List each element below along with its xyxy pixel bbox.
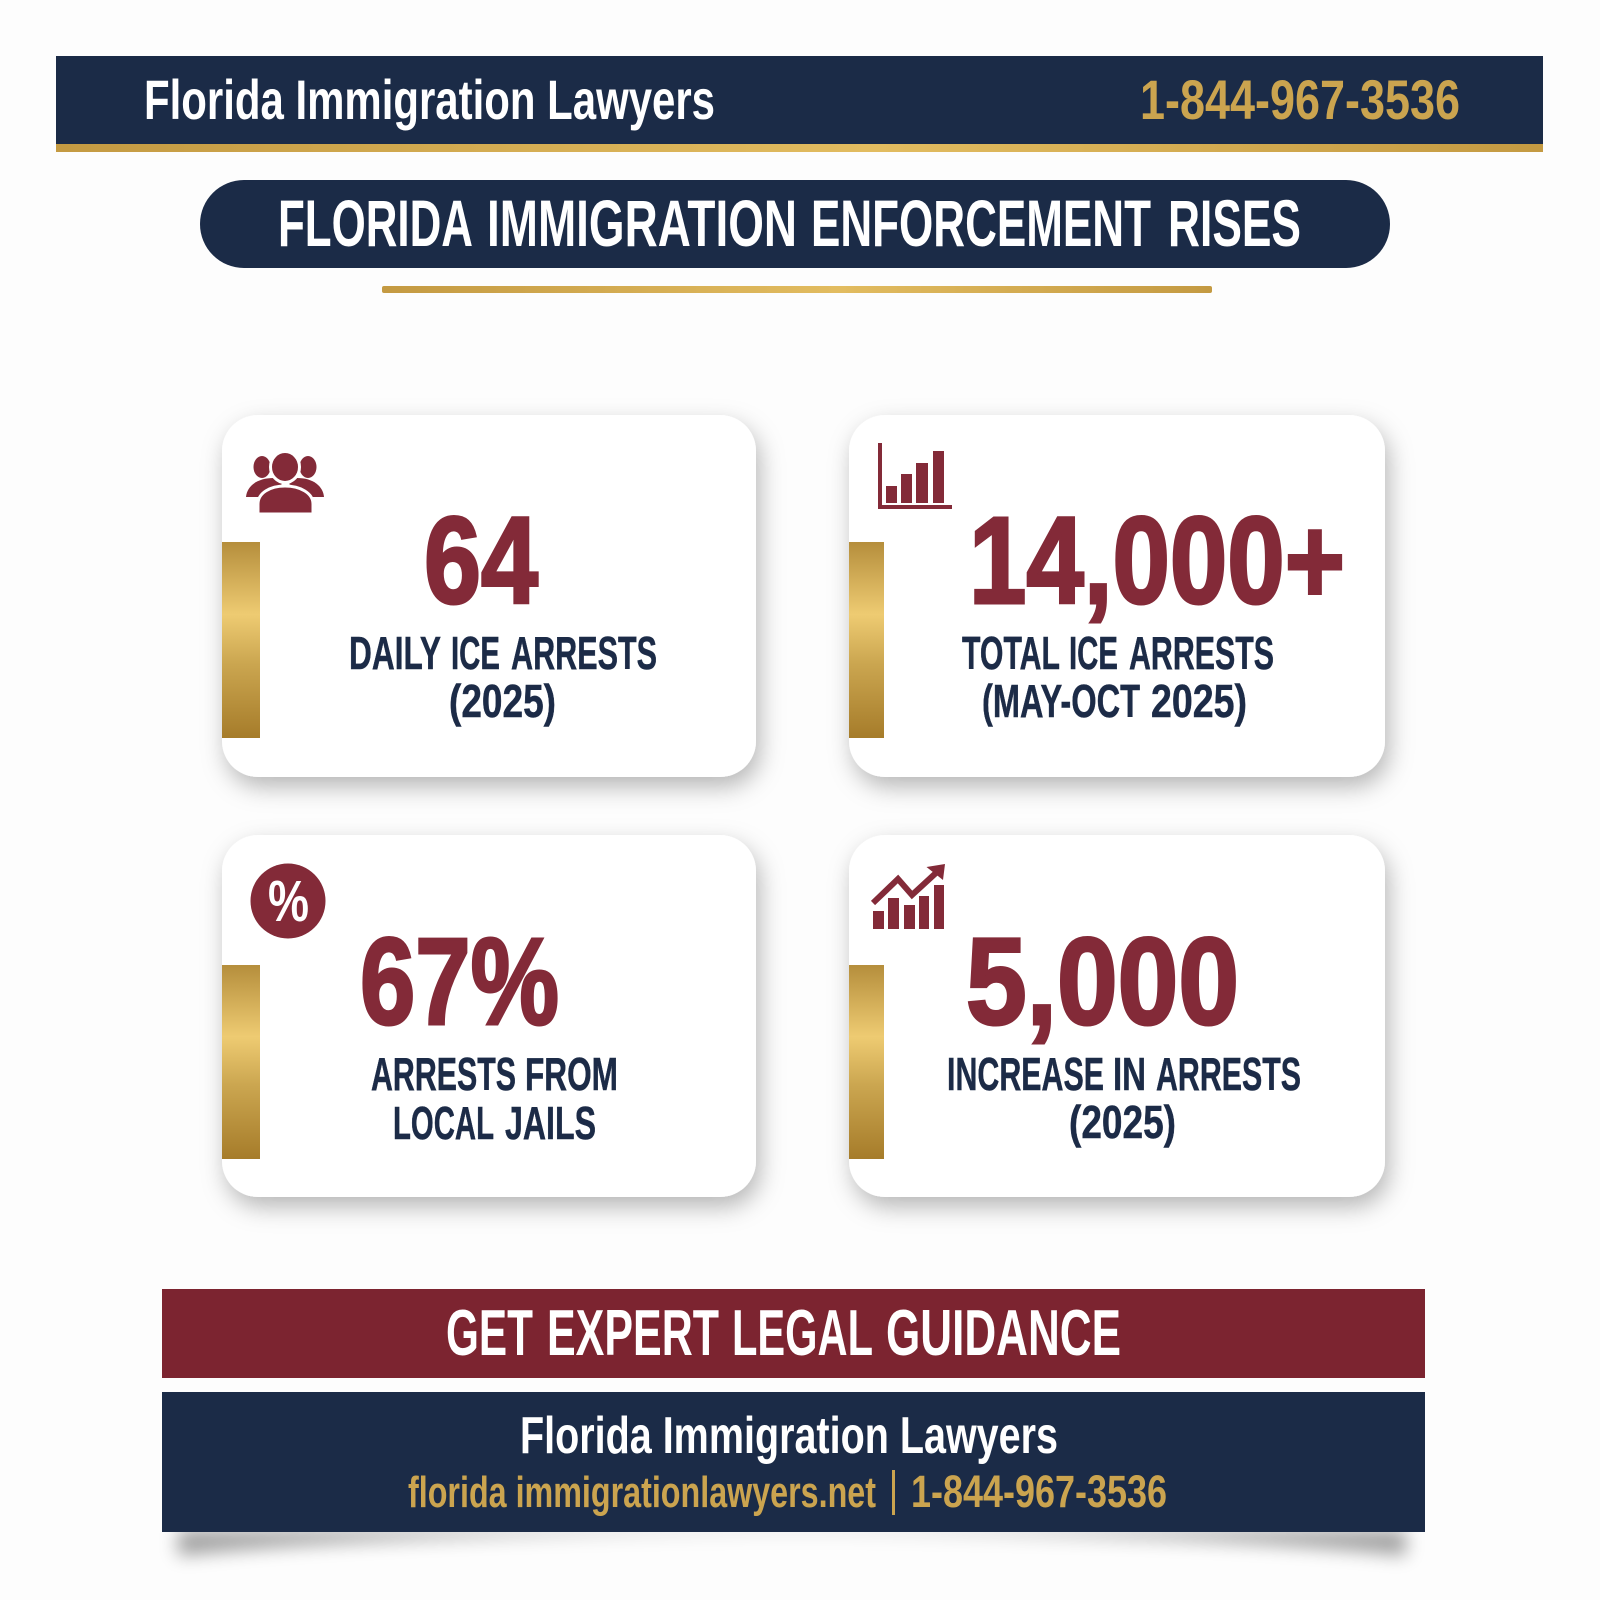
label (947, 1048, 1301, 1148)
title pill: ENFORCEMENT (811, 186, 1151, 260)
header phone number: 1-844-967-3536 (1140, 68, 1460, 131)
accent bar (849, 965, 884, 1159)
header firm name: Florida Immigration Lawyers (144, 68, 715, 131)
label: ICE (1069, 627, 1118, 679)
label (371, 1048, 618, 1149)
header bar (56, 56, 1543, 152)
label: FROM (525, 1048, 618, 1100)
big number 67%: 67% (360, 914, 559, 1051)
card: increase in arrests (849, 835, 1385, 1197)
title underline (382, 286, 1212, 293)
label: INCREASE (947, 1048, 1104, 1100)
contact panel (162, 1392, 1425, 1532)
label (962, 627, 1274, 727)
call to action banner: LEGAL (732, 1296, 873, 1369)
accent bar (222, 965, 260, 1159)
label: ARRESTS (1129, 627, 1274, 679)
label: (2025) (449, 675, 556, 727)
title pill (200, 180, 1390, 268)
icon: rising trend chart (873, 864, 945, 929)
label: ARRESTS (371, 1048, 516, 1100)
accent bar (222, 542, 260, 738)
label: ARRESTS (511, 627, 657, 679)
label: TOTAL (962, 627, 1060, 679)
title pill: RISES (1168, 186, 1301, 260)
card: arrests from local jails (222, 835, 756, 1197)
big number 64: 64 (424, 493, 538, 630)
big number 14,000+: 14,000+ (969, 493, 1345, 630)
card: total ICE arrests (849, 415, 1385, 777)
label: IN (1113, 1048, 1146, 1100)
card: daily ICE arrests (222, 415, 756, 777)
title pill: IMMIGRATION (487, 186, 797, 260)
footer shadow (178, 1530, 1406, 1556)
title pill: FLORIDA (278, 186, 473, 260)
label: ARRESTS (1156, 1048, 1301, 1100)
label: JAILS (505, 1097, 596, 1149)
label: 2025) (1151, 675, 1247, 727)
call to action banner (162, 1289, 1425, 1378)
icon: bar chart (878, 443, 952, 509)
label: DAILY (349, 627, 441, 679)
call to action banner: GUIDANCE (886, 1296, 1121, 1369)
label: (2025) (1069, 1096, 1176, 1148)
icon: percent circle: % (268, 869, 309, 934)
label: ICE (451, 627, 500, 679)
label: LOCAL (393, 1097, 494, 1149)
label (349, 627, 657, 727)
separator (892, 1470, 895, 1515)
icon: group of people (246, 452, 324, 514)
firm name: Florida Immigration Lawyers (520, 1407, 1058, 1465)
big number 5,000: 5,000 (966, 914, 1239, 1051)
call to action banner: EXPERT (547, 1296, 719, 1369)
icon: percent circle (250, 864, 326, 938)
phone number: 1-844-967-3536 (911, 1466, 1167, 1517)
label: (MAY-OCT (982, 675, 1140, 727)
website: florida immigrationlawyers.net (408, 1468, 876, 1517)
accent bar (849, 542, 884, 738)
call to action banner: GET (446, 1296, 533, 1369)
